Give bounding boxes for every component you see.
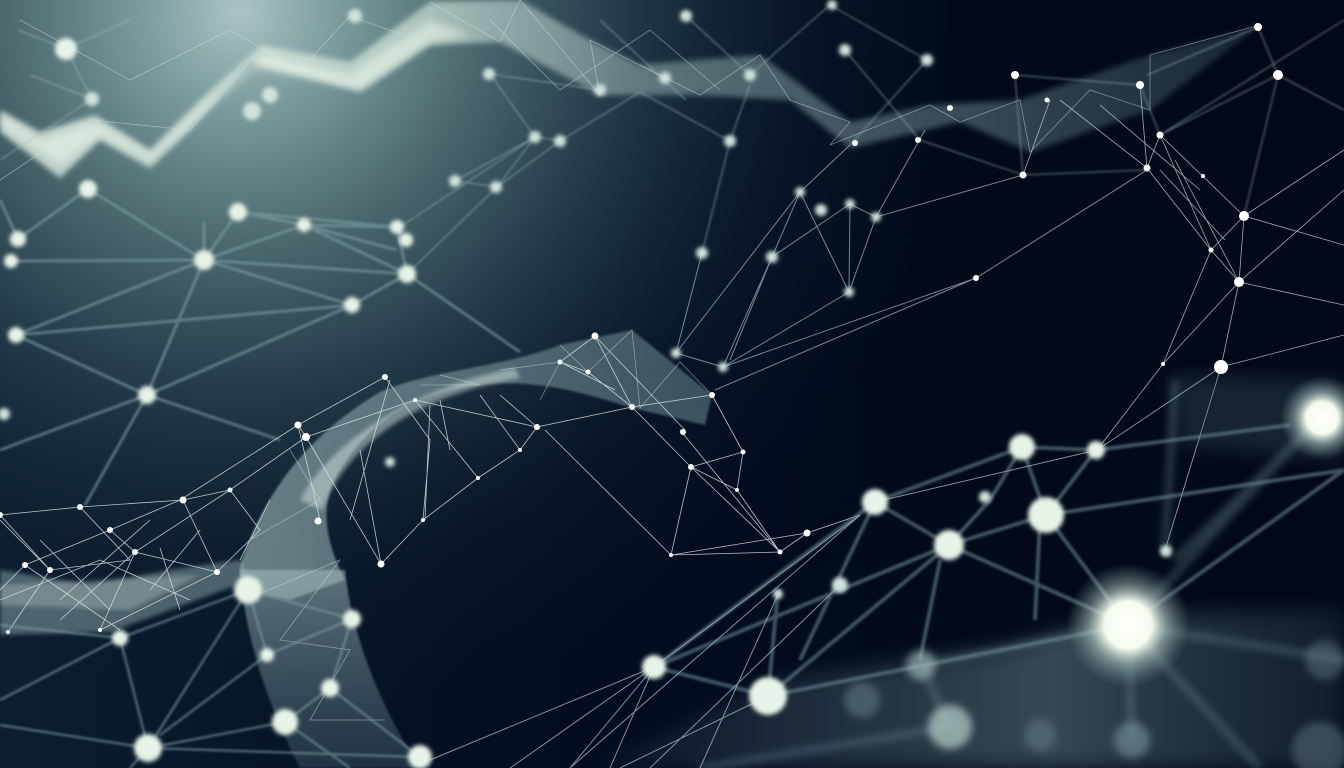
- right wire web: [1023, 85, 1344, 550]
- sharp nodes: [0, 23, 1283, 634]
- upper-middle thin wires: [676, 130, 1147, 390]
- left thick network lines: [0, 189, 520, 505]
- small blurred nodes: [0, 0, 1172, 599]
- fine wire mesh around mid ribbon: [0, 336, 860, 632]
- lower thin wires: [430, 367, 1221, 768]
- top ribbon: [0, 0, 1260, 180]
- bottom-right ribbon: [600, 375, 1344, 768]
- bottom-right network lines: [654, 425, 1344, 696]
- mid ribbon: [240, 330, 712, 768]
- top network lines: [0, 5, 1344, 274]
- glow: large focal nodes: [1066, 376, 1344, 687]
- large blurred nodes: [4, 38, 1105, 768]
- bottom-left network lines: [0, 590, 420, 768]
- left ribbon: [0, 560, 250, 635]
- out-of-focus nodes: [844, 640, 1344, 768]
